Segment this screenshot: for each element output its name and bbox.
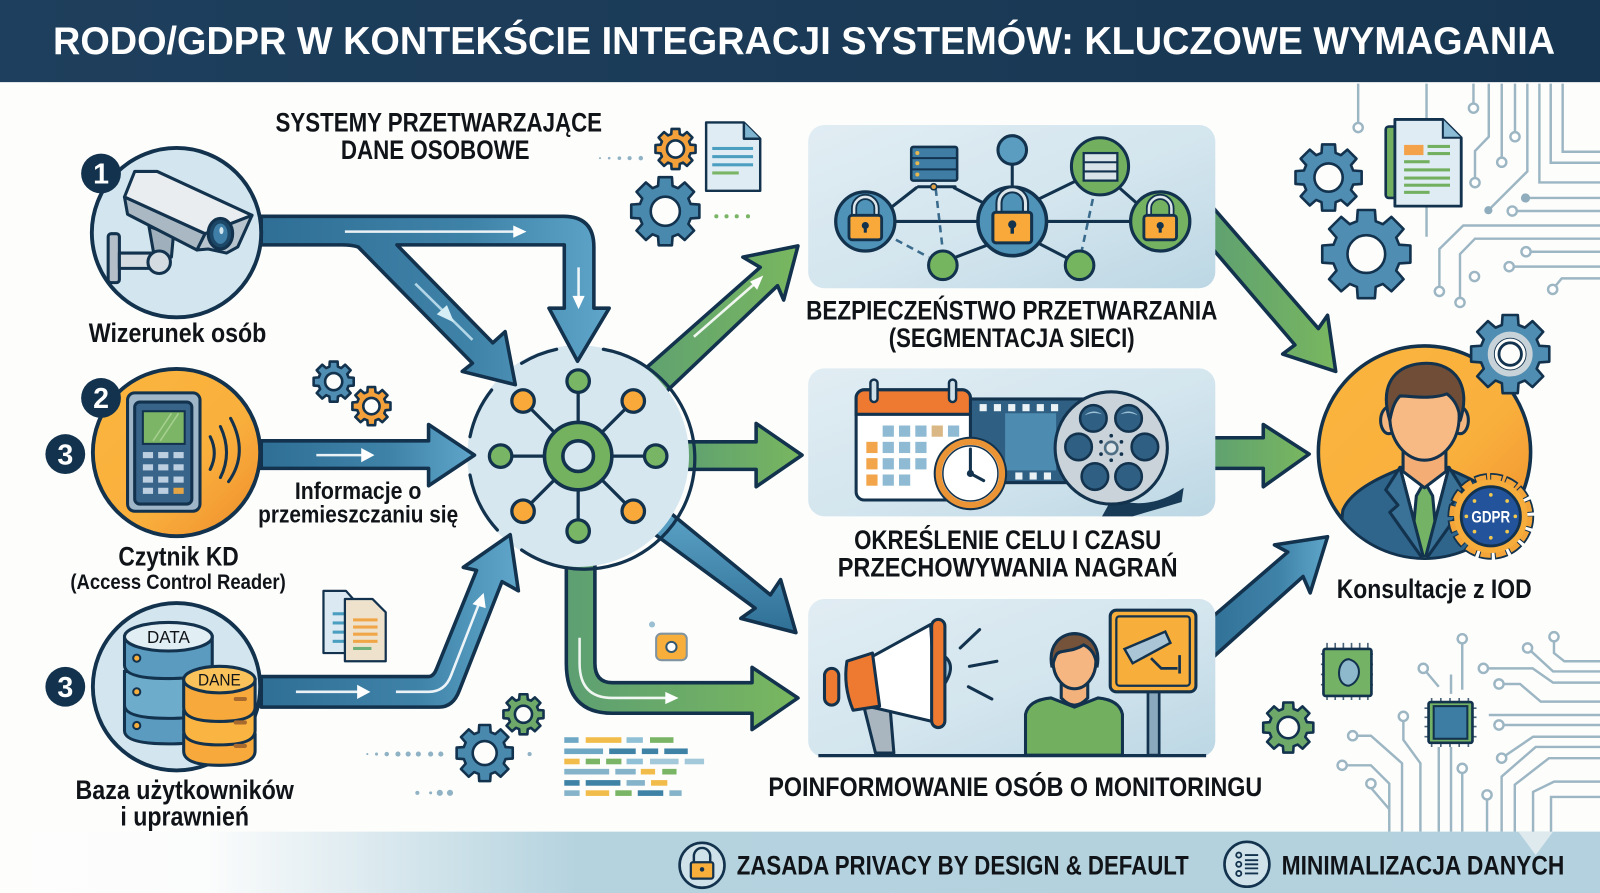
title: RODO/GDPR W KONTEKŚCIE INTEGRACJI SYSTEMÓW: KLUCZOWE WYMAGANIA [53,19,1555,63]
server node [911,147,957,181]
label: baza [76,775,294,832]
decor: right gears and document [1296,119,1461,298]
arrow: retention to IOD [1204,424,1309,487]
label: wizerunek: Wizerunek osób [89,318,266,348]
film strip [964,399,1092,483]
label: movement info: przemieszczaniu się [258,501,458,528]
decor: documents [323,591,386,661]
green server node [1071,138,1129,195]
person in suit [1340,362,1476,558]
badge 1: 1 [93,159,109,191]
source: database: DATA [147,627,190,647]
panel heading: retention [838,525,1178,583]
panel heading: notice: POINFORMOWANIE OSÓB O MONITORINGU [768,772,1262,802]
decor: top gears and document [599,122,760,245]
badge 3: 3 [57,672,73,704]
icon: keypad reader [128,393,200,511]
lock left [836,192,895,251]
megaphone [824,619,951,753]
arrow: database to hub [261,535,518,707]
icon: wireless waves [210,418,239,482]
footer label: privacy by design: ZASADA PRIVACY BY DESIGN & DEFAULT [737,850,1189,880]
badge 3 [45,434,85,474]
badge 1 [81,154,121,193]
icon: orange database [184,666,255,765]
arrow: hub to panel notice green elbow [566,551,798,730]
panel heading: retention: PRZECHOWYWANIA NAGRAŃ [838,553,1178,583]
source: access reader [45,369,286,594]
sound lines [960,630,997,699]
network diagram [836,136,1190,280]
heading: systems: DANE OSOBOWE [341,135,530,165]
circuit traces bottom right [1338,632,1600,832]
heading: systems: SYSTEMY PRZETWARZAJĄCE [276,108,602,138]
panel heading: security [806,295,1217,353]
arrow: hub to panel notice blue [639,502,796,633]
IOD consultant [1318,315,1549,604]
panel: notice [768,599,1262,802]
icon: CCTV camera [108,171,252,283]
person [1026,634,1122,755]
arrow: camera to hub (split) [261,216,609,385]
label: baza: Baza użytkowników [76,775,294,805]
badge 3: 3 [57,439,73,471]
icon: footer padlock [680,843,724,888]
arrow: security to IOD [1204,197,1336,371]
badge 2: 2 [93,383,109,415]
panel heading: security: (SEGMENTACJA SIECI) [889,323,1135,353]
label: baza: i uprawnień [120,802,249,832]
source: database [45,603,294,832]
badge: GDPR seal: GDPR [1471,508,1510,526]
icon: gear [1471,315,1549,393]
badge 2 [81,378,121,418]
heading: systems [276,108,602,165]
film reel [1055,392,1184,516]
badge: GDPR seal [1452,478,1530,555]
warning sign [1110,610,1196,755]
arrow: hub to panel retention [673,423,802,487]
panel heading: security: BEZPIECZEŃSTWO PRZETWARZANIA [806,295,1217,325]
clock [934,437,1007,510]
label: movement info [258,478,458,528]
label: czytnik: Czytnik KD [118,541,239,571]
arrow: notice to IOD [1204,537,1328,665]
label: access control reader: (Access Control Reader) [70,570,286,594]
decor: lower gears [366,694,544,796]
source: camera [81,148,266,348]
panel: retention [808,368,1215,583]
panel heading: retention: OKREŚLENIE CELU I CZASU [854,525,1161,555]
arrow: reader to hub [261,424,474,486]
badge 3 [45,667,85,707]
arrow: hub to panel security [631,246,798,406]
decor: chips and gear [1263,643,1477,753]
central hub network [470,349,695,569]
icon: blue database [124,622,212,744]
label: konsultacje: Konsultacje z IOD [1337,574,1532,604]
source: database: DANE [198,672,241,690]
lock center [978,187,1047,256]
header bar [0,0,1600,82]
lock right [1131,192,1190,251]
calendar [856,380,970,500]
panel: security of processing [806,125,1217,353]
decor: middle gears [314,362,390,425]
circuit traces top right [1354,84,1600,307]
label: movement info: Informacje o [295,478,421,505]
central hub disc [467,345,689,567]
decor: small lock tag [649,621,687,660]
icon: footer checklist [1224,842,1269,887]
decor: code lines [564,737,704,796]
footer band [0,832,1600,893]
